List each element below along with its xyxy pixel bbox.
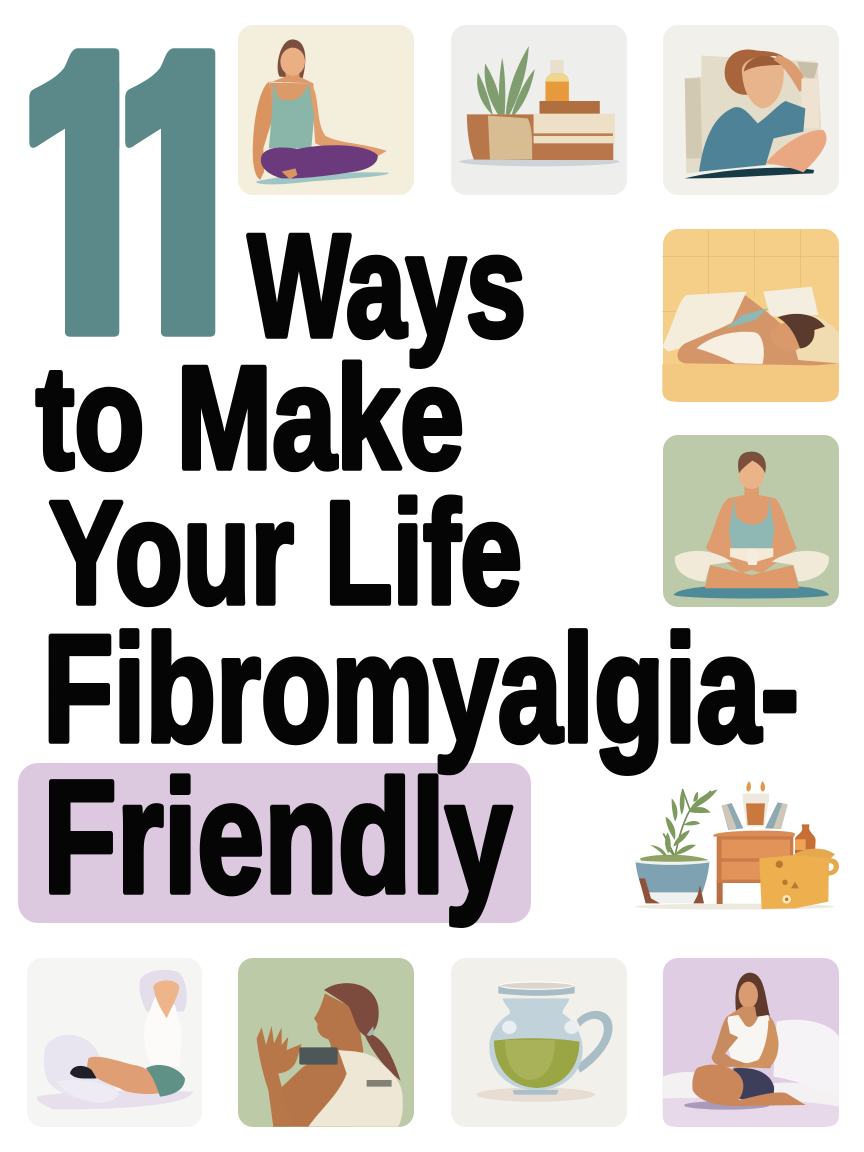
decoration: plant, nightstand, candles and cheese-like block [635, 781, 839, 910]
title text: Your Life [49, 471, 522, 634]
card: woman resting on a pillow with head illustration [27, 958, 202, 1127]
highlight behind Friendly [18, 763, 531, 923]
card: glass teapot of green tea [451, 958, 627, 1127]
card: woman holding her head [663, 25, 839, 195]
card: woman with massage device on shoulder [238, 958, 414, 1127]
card: seated meditation woman [238, 25, 414, 195]
card: plant, oil bottle and books [451, 25, 627, 195]
title number: 11: 11 [36, 38, 230, 345]
card: woman sleeping on bed [662, 229, 839, 402]
title text: Ways [248, 204, 526, 367]
title text [36, 204, 799, 926]
card: seated meditation, green [663, 435, 839, 607]
card: woman sitting on bed, lilac [663, 958, 839, 1127]
title text: Friendly [43, 747, 512, 926]
title text: to Make [36, 336, 464, 499]
